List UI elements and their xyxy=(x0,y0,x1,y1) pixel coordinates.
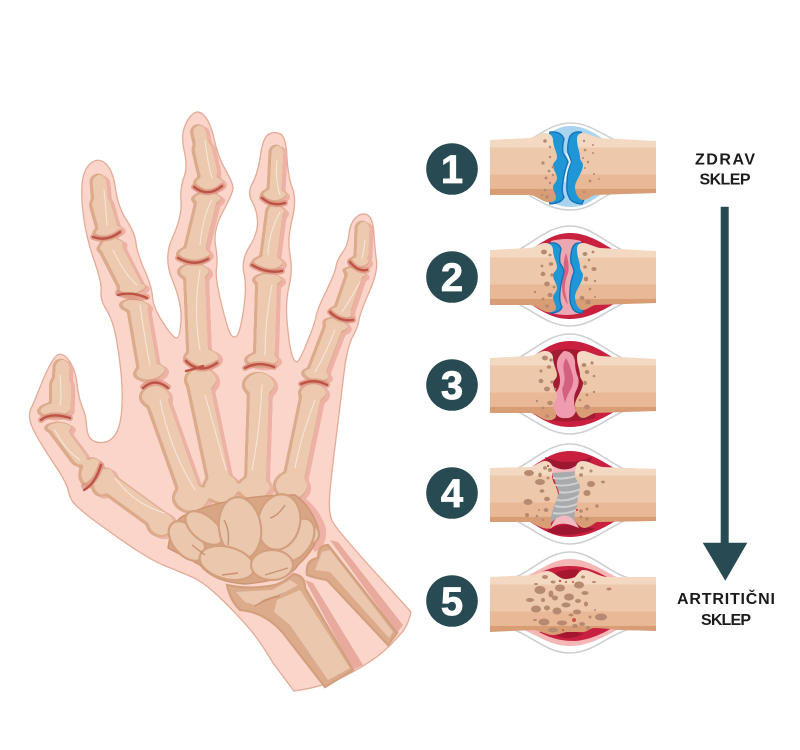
joint 5: severe arthritis xyxy=(490,552,656,653)
bone shadows on skin xyxy=(40,134,403,670)
radius xyxy=(227,574,353,687)
joint 3: cartilage loss xyxy=(490,334,656,434)
finger and metacarpal bones xyxy=(36,132,369,537)
label: healthy joint: SKLEP xyxy=(700,172,751,188)
label: healthy joint: ZDRAV xyxy=(695,152,755,168)
carpal, radius and ulna bones xyxy=(161,490,397,687)
step 5 number badge xyxy=(426,575,478,627)
ulna xyxy=(307,545,397,645)
step 5 number badge: 5 xyxy=(441,580,463,624)
step 3 number badge xyxy=(426,359,478,411)
step 1 number badge: 1 xyxy=(441,148,463,192)
label: arthritic joint: SKLEP xyxy=(701,612,751,629)
step 2 number badge xyxy=(426,251,478,303)
radius and ulna light cores xyxy=(236,550,393,680)
progression arrow xyxy=(703,207,747,581)
hand skin silhouette xyxy=(29,112,411,691)
step 4 number badge xyxy=(426,467,478,519)
step 1 number badge xyxy=(426,143,478,195)
step 2 number badge: 2 xyxy=(441,256,463,300)
label: arthritic joint: ARTRITIČNI xyxy=(677,589,775,608)
bone highlights xyxy=(55,140,365,513)
joint 1: healthy xyxy=(490,123,656,210)
step 3 number badge: 3 xyxy=(441,364,463,408)
joint 4: bone erosion xyxy=(490,444,656,544)
hand skeleton illustration xyxy=(29,112,411,691)
step 4 number badge: 4 xyxy=(441,472,464,516)
joint 2: early inflammation xyxy=(490,226,656,326)
inflamed finger joints xyxy=(41,186,367,490)
